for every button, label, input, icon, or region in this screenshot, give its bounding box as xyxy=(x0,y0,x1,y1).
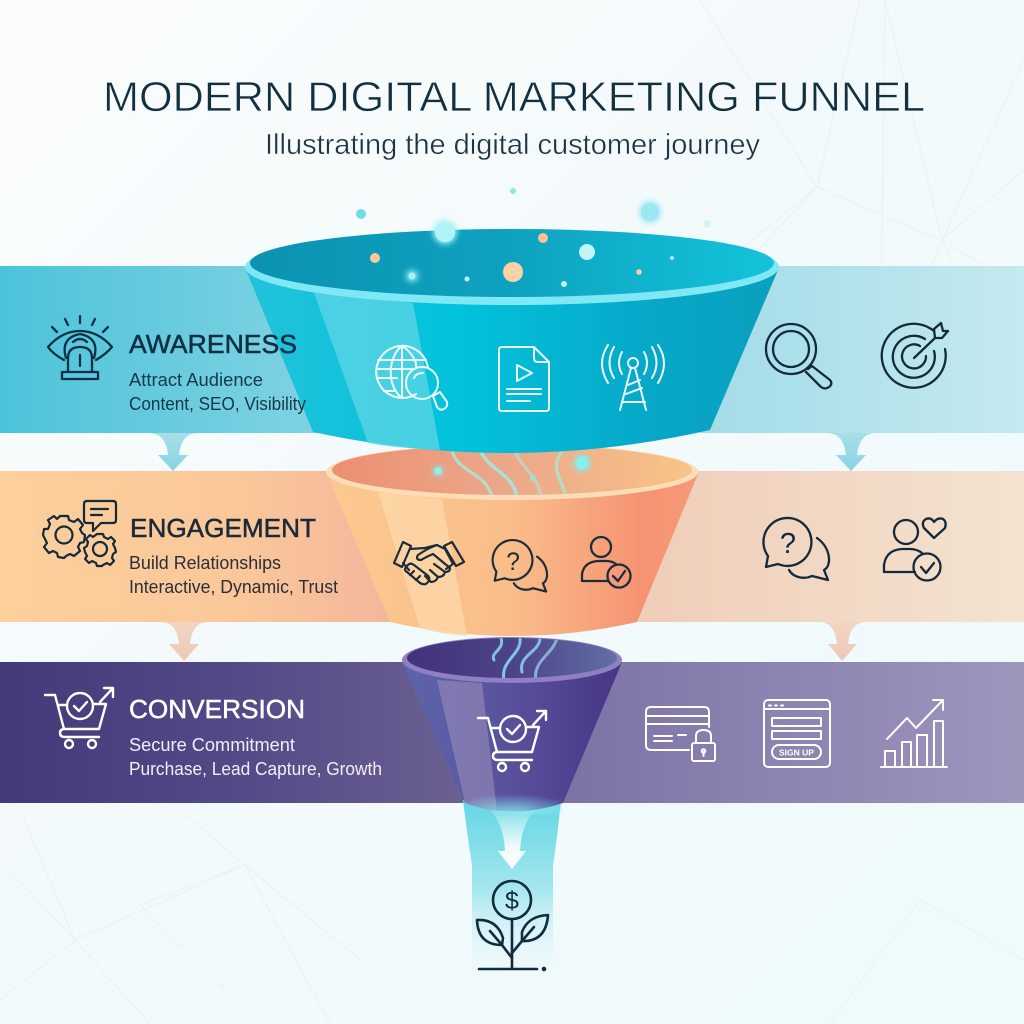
video document icon xyxy=(499,347,549,411)
title: MODERN DIGITAL MARKETING FUNNEL xyxy=(103,73,925,120)
text: engagement line 1: Build Relationships xyxy=(129,553,281,573)
arrow: engagement right xyxy=(820,622,865,661)
band: conversion left xyxy=(0,662,480,803)
band: conversion right xyxy=(550,662,1024,803)
icon: money plant: $ xyxy=(505,887,519,915)
icon: question chat xyxy=(493,540,547,592)
engagement flow lines xyxy=(452,450,566,497)
heading: engagement: ENGAGEMENT xyxy=(130,513,316,543)
band: awareness right xyxy=(700,266,1024,433)
icon: question chat right: ? xyxy=(780,528,796,560)
heading: awareness: AWARENESS xyxy=(129,329,297,359)
icon: question chat right xyxy=(763,518,829,580)
text: awareness line 2: Content, SEO, Visibility xyxy=(129,394,306,414)
icon: growth chart xyxy=(881,700,947,767)
icon: cart left xyxy=(45,688,113,748)
icon: eye with beacon xyxy=(48,316,112,379)
text: engagement line 2: Interactive, Dynamic, Trust xyxy=(129,577,338,597)
stem arrow xyxy=(490,810,535,869)
icon: verified user xyxy=(582,537,630,588)
band: awareness left xyxy=(0,266,330,433)
band: engagement right xyxy=(630,471,1024,622)
text: conversion line 1: Secure Commitment xyxy=(129,735,295,755)
band: engagement left xyxy=(0,471,400,622)
text: conversion line 2: Purchase, Lead Capture, Growth xyxy=(129,759,382,779)
icon: credit card lock xyxy=(646,707,715,761)
heading: conversion: CONVERSION xyxy=(129,694,305,724)
funnel tier: conversion xyxy=(402,637,622,815)
globe search icon xyxy=(376,346,447,410)
conversion flow lines xyxy=(493,638,557,682)
icon: sign up form: SIGN UP xyxy=(779,748,814,758)
icon: user heart check xyxy=(884,518,946,580)
broadcast tower icon xyxy=(602,345,664,410)
arrow: engagement left xyxy=(162,622,207,661)
icon: target xyxy=(882,323,948,388)
text: awareness line 1: Attract Audience xyxy=(129,370,263,390)
arrow: awareness left xyxy=(150,433,197,471)
subtitle: Illustrating the digital customer journey xyxy=(265,129,760,161)
glowing dots xyxy=(433,455,590,481)
icon: search xyxy=(766,324,831,388)
icon: gears with speech bubble xyxy=(43,501,116,566)
funnel tier: awareness xyxy=(245,229,779,453)
glowing particles xyxy=(356,188,711,287)
funnel stem xyxy=(463,800,561,975)
icon: money plant xyxy=(477,881,548,970)
icon: sign up form xyxy=(764,700,830,767)
funnel tier: engagement xyxy=(326,444,698,636)
arrow: awareness right xyxy=(828,433,875,471)
icon: handshake xyxy=(394,542,464,584)
icon: question chat: ? xyxy=(506,548,520,576)
icon: cart with check xyxy=(478,711,546,771)
